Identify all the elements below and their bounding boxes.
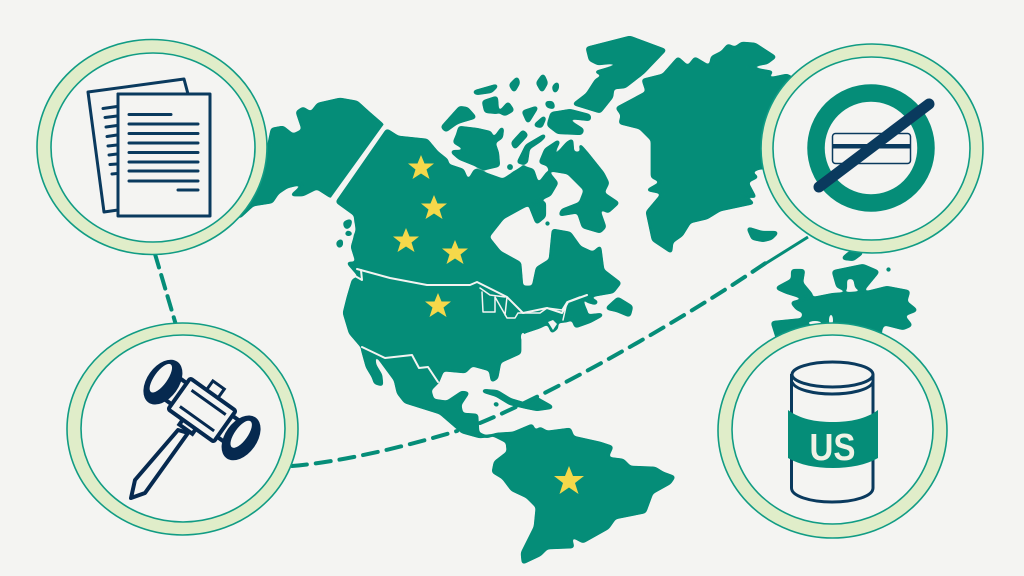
circle: no card: [761, 44, 983, 253]
Baffin Island: [548, 140, 618, 232]
star: Canada north: [408, 155, 434, 179]
Cuba and Caribbean: [484, 391, 551, 409]
Iceland: [749, 229, 776, 240]
Arctic islands: [443, 76, 589, 224]
Europe: [773, 253, 915, 345]
Ellesmere Island: [574, 37, 665, 112]
Alaska: [200, 99, 383, 217]
Baja California: [362, 349, 382, 385]
stars: [393, 155, 584, 494]
icon: barrel labelled US: [788, 362, 878, 502]
star: USA: [425, 293, 451, 317]
icon: prohibited credit card: [816, 93, 929, 203]
star: South America: [554, 466, 584, 494]
Atlantic Canada islands: [573, 298, 631, 326]
borders: white country lines and lakes: [333, 126, 833, 382]
icon: gavel: [131, 348, 272, 498]
icon: documents: [88, 79, 210, 216]
circle: US barrel: [718, 323, 947, 538]
star: Canada 2: [421, 195, 447, 219]
Pacific coast islands: [338, 221, 350, 246]
Greenland: [617, 43, 830, 252]
dashed arrow: gavel to card circle: [292, 237, 808, 466]
star: Canada 4: [442, 240, 468, 264]
Canada, USA, Mexico and South America: [337, 130, 674, 563]
map: Americas, Greenland and Europe: [200, 37, 915, 563]
circle: gavel: [67, 323, 298, 535]
dashed arrow: documents to gavel: [155, 254, 176, 325]
icon: barrel labelled US: US: [810, 427, 856, 469]
circle: documents: [37, 40, 267, 254]
star: Canada 3: [393, 228, 419, 252]
